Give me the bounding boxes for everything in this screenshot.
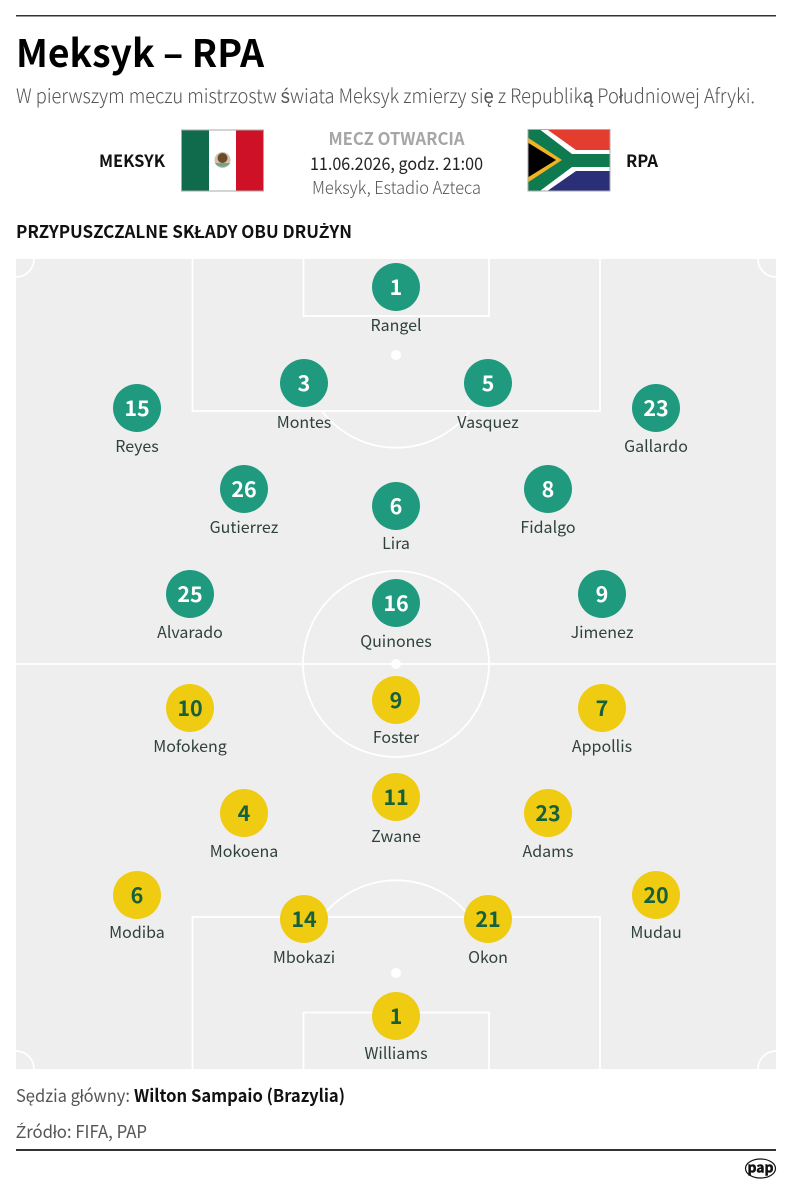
player: Lira [372,482,420,554]
player: Reyes: Reyes [115,433,159,457]
player: Williams: Williams [364,1040,428,1064]
player: Okon: 21 [475,903,501,934]
team label: Meksyk: MEKSYK [99,147,165,172]
player: Modiba: 6 [131,879,143,910]
title: Meksyk – RPA [16,23,265,78]
player: Reyes [113,384,161,457]
player: Williams [364,992,428,1064]
player: Vasquez: Vasquez [457,409,519,433]
player: Appollis [572,684,632,757]
player: Adams: Adams [523,838,573,862]
player: Jimenez [571,570,634,643]
player: Gutierrez: Gutierrez [210,514,279,538]
player: Zwane: Zwane [371,823,421,847]
player: Mudau [630,871,682,943]
player: Modiba [109,871,165,943]
player: Mokoena: 4 [238,797,251,828]
player: Mokoena [210,789,278,862]
player: Mofokeng [153,684,227,757]
heading: lineups: PRZYPUSZCZALNE SKŁADY OBU DRUŻYN [16,219,352,244]
player: Quinones [360,579,432,652]
match info [310,126,483,200]
player: Gutierrez: 26 [231,473,257,504]
player: Mokoena: Mokoena [210,838,278,862]
player: Alvarado: 25 [177,578,203,609]
player: Appollis: 7 [596,692,608,723]
player: Zwane [371,773,421,847]
player: Mofokeng: Mofokeng [153,733,227,757]
subtitle: W pierwszym meczu mistrzostw świata Meksyk zmierzy się z Republiką Południowej Afryki. [16,80,755,109]
player: Alvarado [157,570,223,643]
player: Foster [372,676,420,748]
player: Adams [523,789,573,862]
football pitch [16,259,776,1069]
referee: Wilton Sampaio (Brazylia) [134,1083,345,1108]
player: Adams: 23 [535,797,561,828]
player: Foster: 9 [390,684,402,715]
player: Jimenez: Jimenez [571,619,634,643]
player: Fidalgo [520,465,576,538]
player: Fidalgo: Fidalgo [520,514,576,538]
referee: Sędzia główny: [16,1083,130,1108]
player: Williams: 1 [390,1000,402,1031]
player: Lira: Lira [382,530,410,554]
player: Montes: 3 [298,367,310,398]
player: Lira: 6 [390,490,402,521]
icon: flag of Mexico [181,130,264,192]
player: Zwane: 11 [383,781,409,812]
player: Quinones: 16 [383,587,409,618]
team: South Africa players [109,676,682,1064]
player: Mofokeng: 10 [177,692,203,723]
player: Alvarado: Alvarado [157,619,223,643]
player: Reyes: 15 [124,392,150,423]
player: Mbokazi [273,895,335,968]
player: Montes [277,359,331,433]
match info: MECZ OTWARCIA [328,126,465,151]
player: Gallardo [624,384,688,457]
player: Gallardo: Gallardo [624,433,688,457]
team label: RPA: RPA [626,147,658,172]
player: Vasquez: 5 [482,367,494,398]
logo: PAP: pap [748,1158,774,1178]
player: Okon: Okon [468,944,508,968]
source: Źródło: FIFA, PAP [16,1119,147,1144]
player: Vasquez [457,359,519,433]
team: Mexico players [113,263,688,652]
icon: flag of South Africa [528,129,610,192]
player: Mbokazi: Mbokazi [273,944,335,968]
player: Modiba: Modiba [109,919,165,943]
player: Gallardo: 23 [643,392,669,423]
player: Okon [464,895,512,968]
player: Montes: Montes [277,409,331,433]
player: Appollis: Appollis [572,733,632,757]
player: Mudau: 20 [643,879,669,910]
player: Jimenez: 9 [596,578,608,609]
match info: Meksyk, Estadio Azteca [312,175,481,200]
player: Rangel: Rangel [370,312,422,336]
player: Quinones: Quinones [360,628,432,652]
match info: 11.06.2026, godz. 21:00 [310,151,483,176]
player: Fidalgo: 8 [542,473,554,504]
player: Rangel [370,263,422,336]
player: Rangel: 1 [390,271,402,302]
player: Gutierrez [210,465,279,538]
referee [16,1083,345,1108]
player: Foster: Foster [373,724,420,748]
player: Mudau: Mudau [630,919,682,943]
player: Mbokazi: 14 [291,903,317,934]
